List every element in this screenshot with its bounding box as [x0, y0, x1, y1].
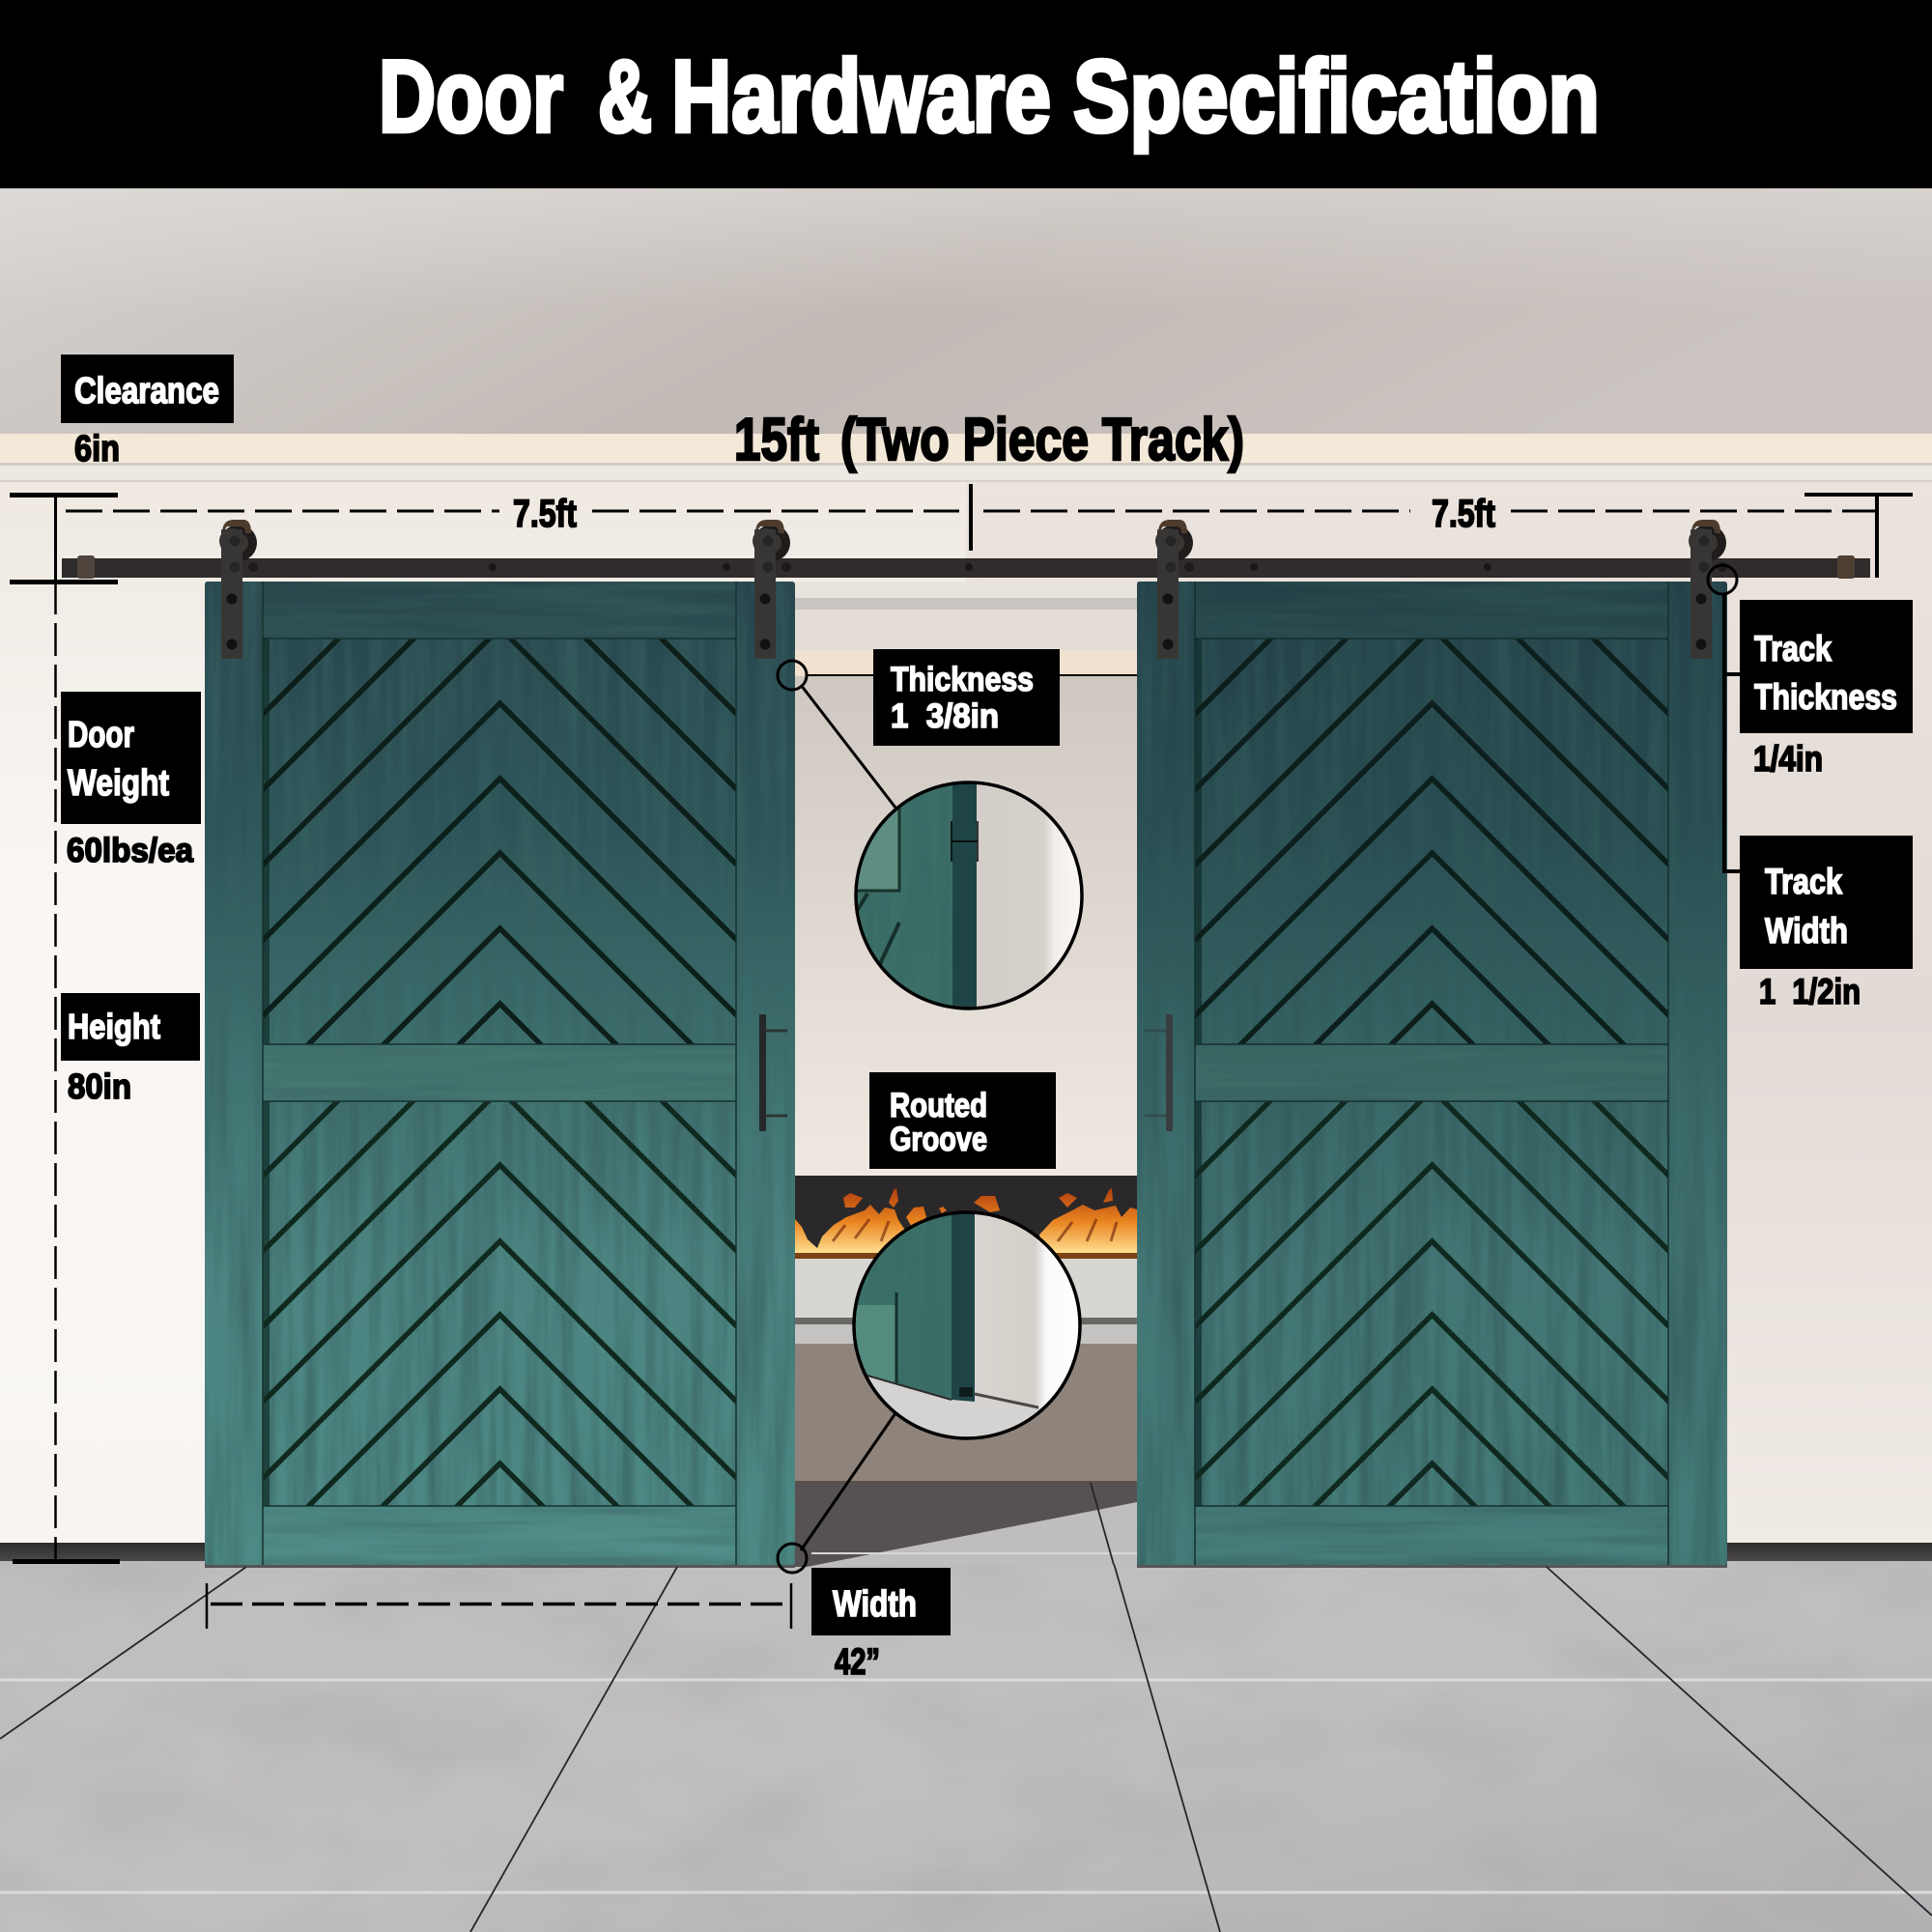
flames [795, 1188, 1137, 1253]
track dimension: centre tick [969, 484, 973, 551]
floor [0, 1483, 1932, 1932]
callout: height [61, 993, 200, 1106]
callout: track thickness: Track [1754, 629, 1832, 668]
track dimension: right half: 7.5ft [1432, 493, 1495, 535]
panel: left door [205, 402, 795, 1756]
callout: clearance: Clearance [74, 371, 219, 412]
dimension: door width [207, 1583, 791, 1629]
leader line and marker: thickness [778, 661, 895, 808]
callout: clearance: 6in [74, 429, 120, 469]
title banner: Hardware [671, 40, 1051, 154]
callout: track width: 1 1/2in [1759, 972, 1861, 1011]
callout: door thickness: Thickness [891, 661, 1034, 698]
callout: track thickness [1740, 600, 1913, 779]
callout: door thickness [808, 649, 1137, 746]
detail magnifier: routed groove at door base [854, 1212, 1080, 1439]
title banner: Door [379, 40, 563, 154]
marker and leader: track callouts [1708, 565, 1740, 871]
icon: left door handle [759, 1014, 787, 1131]
callout: door weight: 60lbs/ea [67, 832, 194, 869]
callout: height: Height [68, 1007, 160, 1046]
title banner: Specification [1073, 40, 1600, 154]
icon: hanger 3 [1155, 520, 1194, 659]
bracket: clearance and height dimension [10, 495, 120, 1564]
track dimension: left half: 7.5ft [513, 493, 577, 535]
callout: height: 80in [68, 1066, 131, 1106]
callout: door weight: Door [68, 715, 134, 755]
callout: track thickness: Thickness [1754, 677, 1897, 717]
callout: clearance [61, 355, 234, 469]
callout: track thickness: 1/4in [1753, 739, 1823, 779]
heading: track length: 15ft [734, 407, 819, 473]
callout: routed groove: Groove [890, 1121, 987, 1158]
icon: hanger 2 [753, 520, 791, 659]
shadow under doors [205, 1563, 1727, 1568]
callout: width: Width [833, 1584, 917, 1625]
icon: hanger 1 [219, 520, 258, 659]
room background [0, 188, 1932, 1561]
callout: door weight [61, 692, 201, 869]
callout: track width: Width [1765, 911, 1848, 951]
icon: right door handle [1145, 1014, 1173, 1131]
title banner: & [598, 40, 652, 154]
callout: track width: Track [1765, 862, 1842, 901]
icon: barn door track with stoppers [62, 555, 1870, 579]
title banner [0, 0, 1932, 188]
callout: width: 42” [835, 1642, 880, 1683]
heading: track length [734, 407, 1244, 473]
callout: door weight: Weight [68, 763, 169, 804]
bracket: right track end [1804, 495, 1913, 578]
callout: routed groove: Routed [890, 1087, 987, 1124]
room seen through the opening [795, 582, 1137, 1567]
callout: width [811, 1568, 951, 1683]
icon: hanger 4 [1689, 520, 1727, 659]
heading: track length: (Two Piece Track) [840, 407, 1244, 473]
detail magnifier: door edge thickness [856, 782, 1082, 1009]
callout: routed groove [869, 1072, 1056, 1169]
leader line and marker: door base [778, 1413, 895, 1573]
callout: track width [1740, 836, 1913, 1011]
panel: right door [1137, 402, 1727, 1756]
callout: door thickness: 1 3/8in [891, 697, 999, 735]
